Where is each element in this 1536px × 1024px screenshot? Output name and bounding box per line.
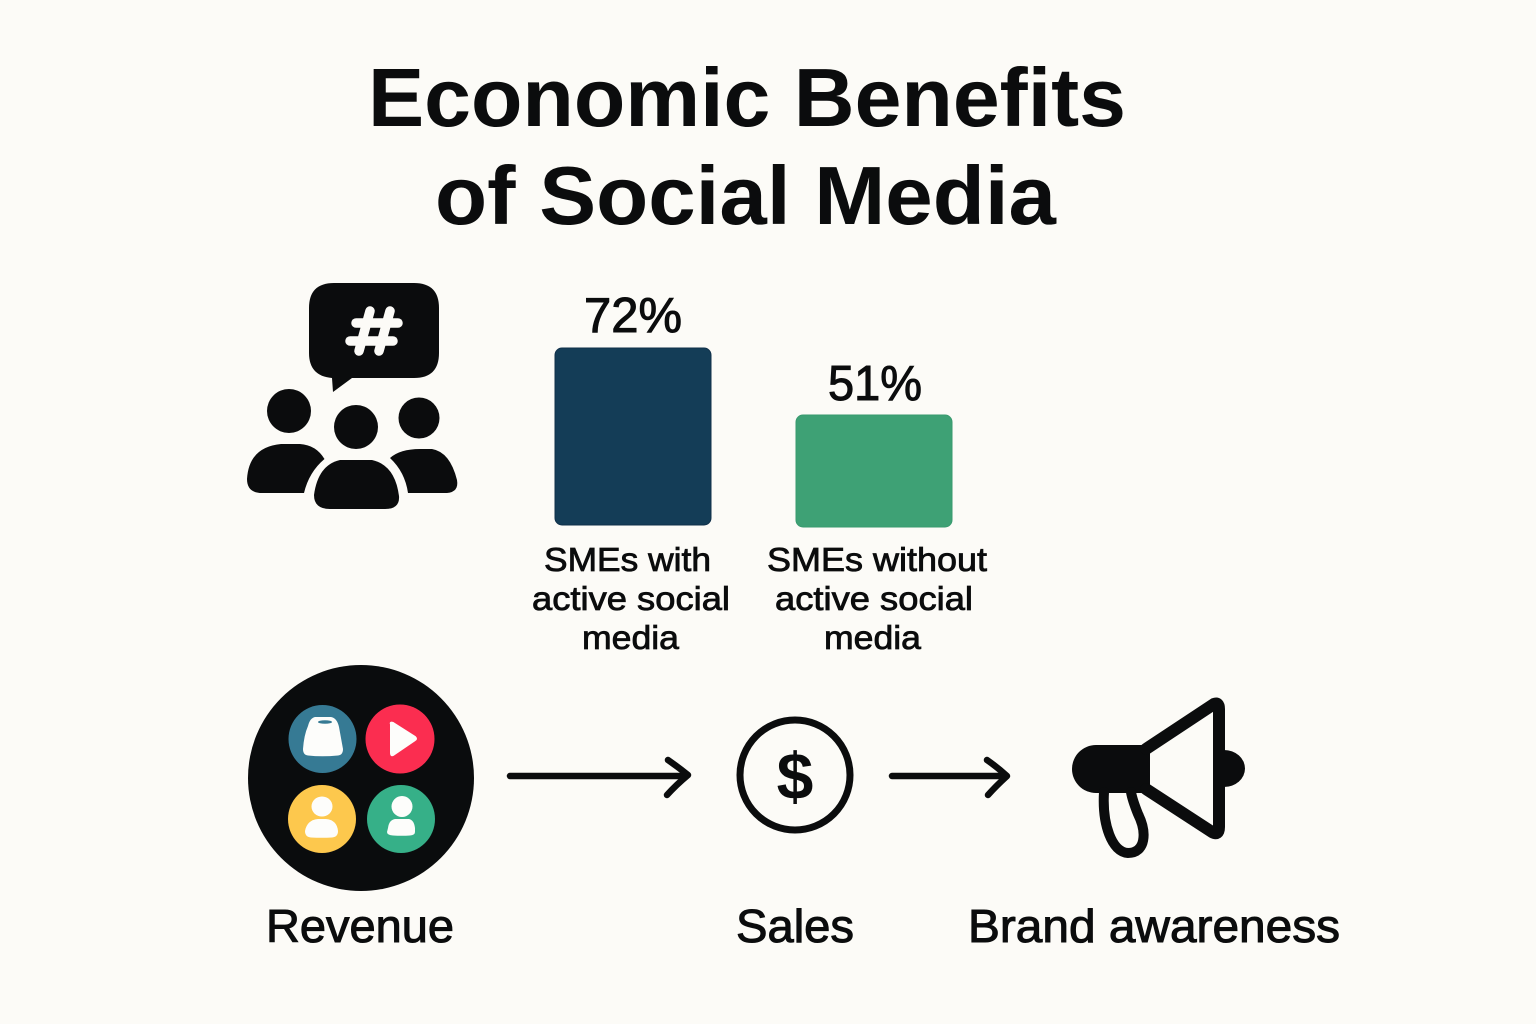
bar: SMEs with active social media: active social [532, 581, 730, 618]
title [368, 51, 1126, 242]
bar: SMEs with active social media [532, 289, 730, 657]
icon: people [247, 389, 457, 509]
icon: social app circle [248, 665, 474, 891]
label: brand awareness: Brand awareness [968, 900, 1340, 952]
arrow: sales to brand awareness [892, 760, 1007, 795]
arrow: revenue to sales [510, 760, 688, 795]
icon: megaphone [1072, 704, 1245, 853]
label: sales: Sales [736, 900, 854, 952]
bar: SMEs without active social media: 51% [828, 357, 922, 411]
icon: green user [367, 785, 435, 853]
bar: SMEs without active social media: media [824, 620, 921, 657]
title: Economic Benefits [368, 51, 1126, 144]
title: of Social Media [435, 149, 1057, 242]
icon: speech bubble [309, 283, 439, 392]
bar: SMEs without active social media [767, 357, 988, 657]
bar chart [532, 289, 988, 657]
icon: community with hashtag speech bubble [247, 283, 457, 509]
bar: SMEs without active social media: active social [775, 581, 973, 618]
bar: SMEs with active social media: SMEs with [544, 542, 711, 579]
icon: dollar coin [740, 720, 850, 830]
bar: SMEs without active social media: SMEs without [767, 542, 988, 579]
icon: yellow user [288, 785, 356, 853]
bar: SMEs with active social media: 72% [584, 289, 682, 343]
bar: SMEs with active social media: media [582, 620, 679, 657]
icon: red play [366, 704, 434, 774]
label: revenue: Revenue [266, 900, 454, 952]
icon: blue bag [288, 705, 356, 773]
icon: dollar coin: $ [777, 739, 813, 813]
